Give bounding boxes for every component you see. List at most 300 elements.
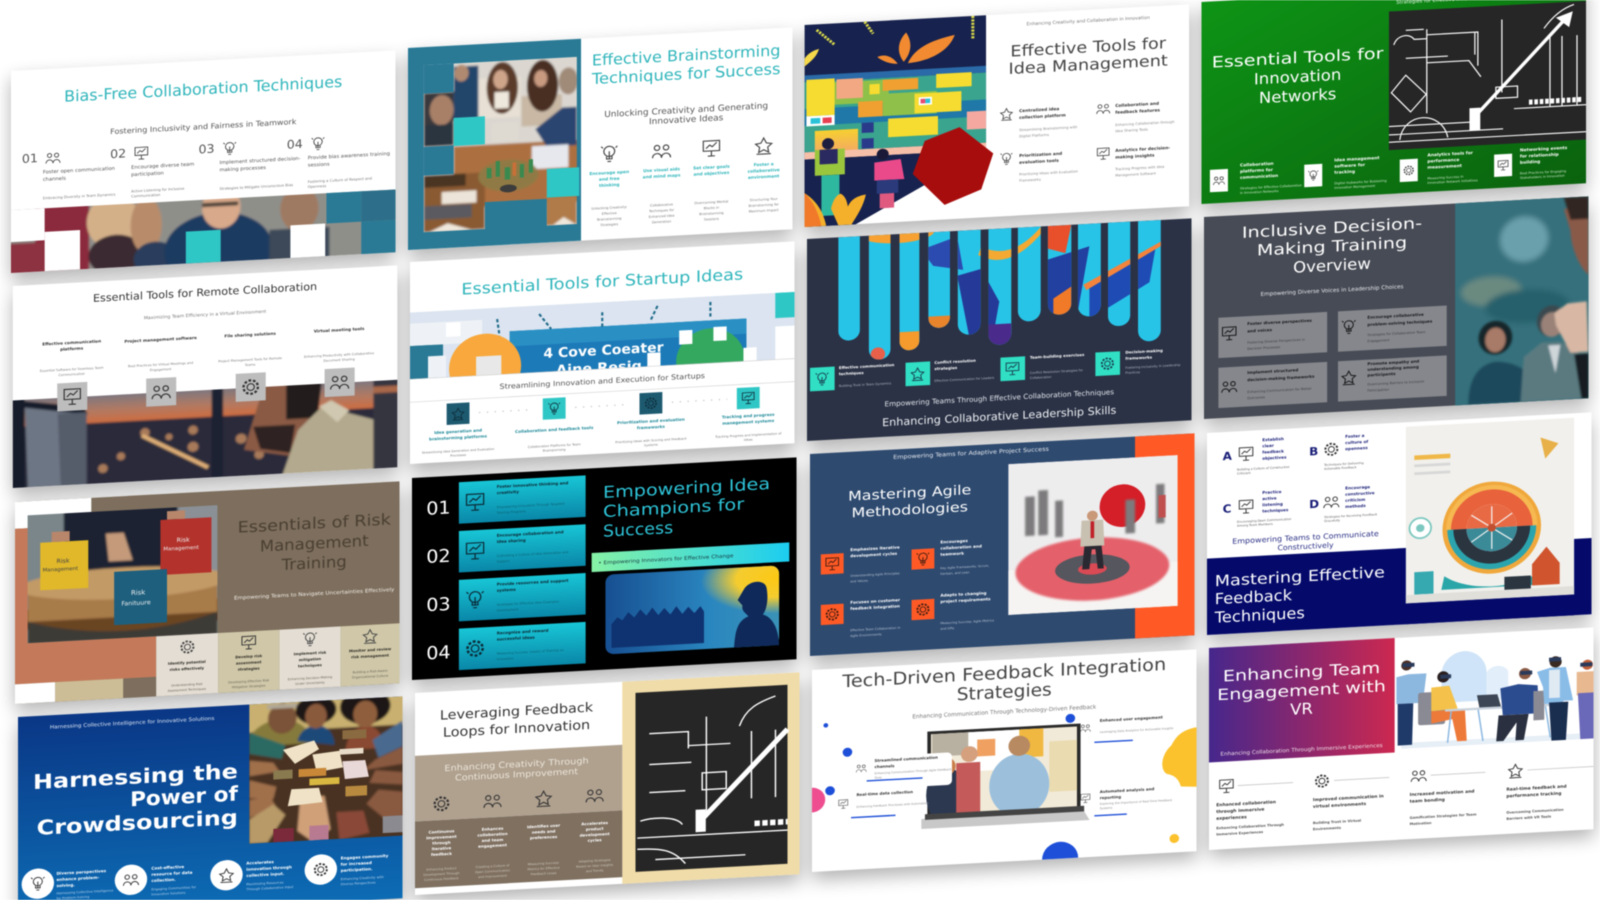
four cards: Engagement (1367, 338, 1390, 343)
subtitle: Empowering Teams to Navigate Uncertainties Effectively (234, 587, 394, 602)
slide: Tech-Driven Feedback Integration Strategies (812, 649, 1197, 872)
four cards: Understanding Risk (171, 682, 203, 688)
four items: building (1520, 159, 1540, 166)
four numbered items: sessions (308, 162, 330, 169)
four items: measurement (1427, 163, 1462, 171)
title: Making Training (1257, 233, 1407, 260)
slide: Harnessing the Power of Crowdsourcing (18, 686, 412, 900)
slide: Essential Tools for Innovation Networks (1202, 0, 1586, 204)
title: Bias-Free Collaboration Techniques (64, 72, 342, 106)
four columns: Best Practices for Virtual Meetings and (128, 361, 193, 368)
four tool items: collection platform (1019, 113, 1066, 120)
four items: teamwork (940, 551, 964, 557)
four items: platforms for (1240, 167, 1274, 175)
four cards: Assessment Techniques (168, 687, 206, 693)
four items: solving. (56, 882, 75, 888)
photo: risk blocks on wood: Risk (131, 589, 145, 597)
four items: Adapts to changing (940, 590, 987, 598)
four items: and KPIs (940, 626, 955, 631)
four items (821, 537, 994, 640)
four items (22, 850, 389, 900)
four items: Key Agile Frameworks: Scrum, (940, 564, 989, 570)
brown band with four columns: Accelerates (581, 820, 609, 826)
four columns: Project Management Tools for Remote (218, 356, 282, 363)
brown band with four columns: improvement (426, 834, 457, 840)
four cyan cards: systems (497, 587, 517, 593)
four icon items: Overcoming Communication (1506, 808, 1564, 815)
slide: Enhancing Collaborative Leadership Skills (807, 207, 1192, 441)
four text callouts: Systems (1100, 806, 1113, 810)
four items: Diverse Perspectives (341, 881, 376, 886)
four items: in Innovation Networks (1240, 189, 1279, 195)
four icon items: Environments (1313, 826, 1341, 831)
four numbered items: Strategies to Mitigate Unconscious Bias (219, 183, 293, 191)
brown band with four columns: Based on User Insights (576, 863, 614, 869)
title: Crowdsourcing (37, 806, 238, 840)
subtitle: Enhancing Communication Through Technology-Driven Feedback (912, 705, 1097, 720)
four cyan cards: Recognize and reward (497, 628, 549, 635)
taupe band with subtitle: Continuous Improvement (455, 767, 579, 784)
taupe band with subtitle (415, 745, 622, 821)
four tool items: feedback features (1115, 107, 1161, 115)
brown band with four columns: Metrics for Effective (527, 866, 560, 871)
four items: Accelerates (246, 859, 275, 866)
title: Loops for Innovation (443, 718, 590, 741)
photo: team over table (422, 56, 578, 233)
four cards: Mitigation Strategies (232, 684, 266, 689)
four items: Maximizing Resources (246, 880, 284, 886)
four tool steps: brainstorming platforms (429, 433, 488, 441)
photo: risk blocks on wood: Risk (177, 537, 190, 544)
four items: Emphasizes iterative (850, 545, 900, 552)
four columns: Unlocking Creativity: (591, 205, 627, 211)
four cyan cards: creativity (497, 489, 519, 495)
brown band with four columns: Continuous Feedback (424, 876, 459, 882)
four cards: strategies (238, 667, 261, 672)
four columns: Enhanced Idea (649, 214, 674, 219)
four tool steps: Streamlining Idea Generation and Evaluation (422, 447, 494, 455)
brown band with four columns: engagement (478, 842, 507, 849)
four tool steps: Prioritizing Ideas with Scoring and Feedback (615, 437, 687, 444)
title: Essentials of Risk (238, 510, 392, 537)
title (1214, 563, 1385, 627)
four tool steps: Collaboration and feedback tools (515, 425, 594, 434)
colour blocks (15, 494, 156, 704)
four columns: Sessions (704, 217, 719, 222)
title: Techniques (1214, 603, 1305, 627)
four columns: collaborative (748, 167, 780, 174)
brown band with four columns: preferences (530, 834, 558, 840)
illustration: gauge dashboard (1406, 418, 1574, 604)
brown band with four columns: collaboration (477, 831, 508, 838)
photo: hands with puzzle (248, 696, 404, 844)
four numbered items: 02 (110, 147, 126, 161)
title (603, 474, 770, 541)
subtitle: Harnessing Collective Intelligence for Innovative Solutions (50, 716, 215, 731)
title: Methodologies (851, 500, 968, 521)
four items: Effective Team Collaboration in (850, 626, 900, 632)
four icon items (1216, 760, 1594, 837)
illustration: team at kanban board (805, 15, 986, 227)
four items (810, 347, 1180, 392)
four cards: Participation (1367, 388, 1389, 393)
A B C D items: Encouraging Open Communication (1237, 517, 1291, 524)
four tool steps: Ideas (744, 438, 753, 442)
line art chart image (1389, 1, 1586, 150)
A B C D items: Criticism (1237, 471, 1251, 476)
four items: collection. (151, 877, 176, 883)
four cards: Encourage collaborative (1367, 312, 1424, 320)
four numbered items: channels (43, 176, 66, 183)
title: Mastering Agile (848, 483, 971, 505)
title (1212, 44, 1384, 110)
four columns: Generation (652, 219, 671, 224)
brown band with four columns: feedback (431, 851, 452, 857)
four columns: Document Sharing (323, 357, 355, 363)
four icon items: Motivation (1410, 821, 1432, 826)
four items: Best Practices for Engaging (1520, 169, 1566, 175)
illustration: banner image: Aine Resig (556, 359, 642, 379)
A B C D items: Establish (1262, 436, 1284, 442)
four items: Through Collaborative Input (245, 885, 294, 891)
subtitle: Enhancing Creativity and Collaboration in Innovation (1027, 15, 1150, 27)
title: Overview (1293, 254, 1371, 277)
four columns: Essential Software for Seamless Team (40, 366, 103, 373)
four cards: Decision Processes (1247, 345, 1280, 351)
four columns: Communication (58, 372, 85, 377)
four tool items: Collaboration and (1115, 101, 1159, 108)
A B C D items: methods (1345, 503, 1366, 509)
four cards (1218, 305, 1447, 408)
four items: Kanban, and Lean (940, 570, 969, 576)
illustration: banner image: 4 Cove Coeater (543, 340, 664, 362)
title: Effective Brainstorming (592, 41, 780, 69)
brown band with four columns: Feedback Loops (531, 871, 557, 876)
slide: Essential Tools for Startup Ideas (410, 241, 795, 464)
four numbered items: 01 (22, 152, 38, 166)
slide: Effective Brainstorming Techniques (408, 27, 793, 250)
brown band with four columns: Creating a Culture of (476, 863, 510, 869)
slide: Enhancing Team Engagement with VR (1209, 627, 1594, 850)
four items: Innovative Solutions (151, 891, 186, 896)
title: Management (260, 531, 369, 556)
four numbered items: Provide bias awareness training (308, 151, 390, 161)
four tool steps: Idea generation and (434, 428, 482, 435)
four columns: thinking (599, 182, 620, 188)
title: Effective Tools for (1010, 34, 1166, 60)
four cyan cards: Cultivating a Culture of Idea Generation and (497, 550, 568, 558)
four tool items: Frameworks (1019, 178, 1041, 183)
title (1009, 34, 1168, 78)
four text callouts: Enhancing Feedback Processes with Automation (856, 801, 929, 809)
four items: Idea management (1334, 155, 1380, 163)
four cards: Strategies for Collaborative Team (1367, 330, 1425, 337)
four text callouts: Enhancing Communication Through Agile Feedback (874, 767, 952, 775)
four items: Understanding Agile Principles (850, 571, 900, 578)
title: Success (603, 518, 673, 541)
four items: Cost-effective (151, 864, 184, 871)
four cyan cards: Innovation (497, 656, 514, 661)
four text callouts: Streamlined communication (874, 755, 938, 763)
four cards: Under Uncertainty (295, 680, 325, 686)
four tool items: Prioritizing Ideas with Evaluation (1019, 170, 1078, 177)
title (841, 655, 1166, 711)
four items: feedback integration (850, 604, 900, 611)
four tool items: Analytics for decision- (1115, 145, 1170, 153)
A B C D items: Techniques for Delivering (1323, 461, 1364, 467)
four icon items: Real-time feedback and (1506, 784, 1567, 793)
title: Enhancing Collaborative Leadership Skills (882, 404, 1117, 429)
illustration: speaker before crowd (605, 565, 779, 654)
four items: Fostering Inclusivity in Leadership (1125, 363, 1180, 370)
title (238, 510, 392, 576)
four items: Effective Communication for Leaders (934, 376, 995, 383)
four icon items: team bonding (1410, 797, 1445, 805)
four items: collective input. (246, 871, 285, 878)
four columns: Set clear goals (693, 164, 730, 171)
four items: Stakeholders in Innovation (1520, 174, 1565, 180)
title: Power of (130, 782, 239, 811)
A B C D items: culture of (1345, 439, 1368, 445)
four tool steps (422, 386, 782, 459)
slide: Bias-Free Collaboration Techniques (5, 50, 402, 298)
numbers: 01 (426, 498, 451, 520)
title (1242, 214, 1422, 279)
subtitle: Empowering Diverse Voices in Leadership Choices (1260, 284, 1404, 298)
four items: Engaging Communities for (151, 885, 197, 891)
four items: Measuring Success in (1427, 175, 1464, 180)
A B C D items: C (1223, 502, 1231, 516)
four numbered items: Active Listening for Inclusive (131, 187, 185, 193)
four tool items: Management Software (1115, 172, 1156, 178)
four items: enhance problem- (56, 875, 100, 882)
four items: Diverse perspectives (56, 868, 107, 876)
brown band with four columns: and team (482, 837, 503, 843)
numbers: 04 (426, 643, 451, 664)
four icon items: through immersive (1216, 807, 1265, 815)
illustration: cyan rounded stripes (838, 219, 1162, 360)
brown band with four columns: product (586, 826, 604, 832)
taupe band with subtitle: Enhancing Creativity Through (444, 757, 589, 774)
four columns (40, 324, 374, 412)
illustration: laptop with meeting (921, 723, 1090, 829)
title: Essential Tools for Startup Ideas (461, 265, 743, 298)
four columns: Structuring Your (750, 197, 778, 202)
A B C D items: D (1309, 497, 1319, 511)
four columns: Collaborative (650, 203, 673, 208)
four numbered items: Implement structured decision- (219, 156, 301, 166)
four cards: Building a Risk-Aware (353, 669, 388, 674)
four cards: Overcoming Barriers to Inclusive (1367, 380, 1424, 386)
brown band with four columns: Development Through (423, 871, 460, 877)
four icon items: Immersive Experiences (1216, 830, 1263, 837)
four text callouts (839, 714, 1174, 830)
four icon items: Enhancing Collaboration Through (1216, 823, 1285, 830)
slide: Leveraging Feedback Loops for Innovation (415, 672, 800, 895)
four columns: Brainstorming (597, 217, 622, 222)
four cards: risk management (351, 653, 389, 659)
brown band with four columns: and Improvement (478, 874, 508, 879)
A B C D items: Among Team Members (1237, 522, 1273, 528)
four cards: Fostering Diverse Perspectives in (1247, 338, 1305, 345)
four items: Analytics tools for (1427, 150, 1474, 158)
four items: Innovation Network Initiatives (1427, 178, 1478, 185)
photo: team around laptop (10, 190, 394, 274)
four tool steps: management systems (722, 418, 775, 426)
four items: Engages community (341, 853, 389, 861)
four tool items: Streamlining Brainstorming with (1019, 125, 1077, 132)
four items (1210, 145, 1568, 197)
four columns: Virtual meeting tools (314, 326, 365, 334)
gradient title panel: Enhancing Collaboration Through Immersive Experiences (1220, 743, 1383, 758)
title: Networks (1259, 85, 1336, 107)
title: Empowering Idea (603, 474, 770, 502)
four cyan cards (459, 475, 586, 670)
four items: frameworks (1125, 355, 1153, 361)
numbers: 02 (426, 546, 451, 568)
title: Training (281, 552, 347, 574)
navy band under image (1406, 594, 1574, 624)
four items: and Values (850, 579, 868, 584)
title: Essential Tools for (1212, 44, 1384, 72)
four columns: Effective communication (42, 339, 101, 347)
four tool steps: Collaboration Platforms for Team (528, 442, 581, 449)
slide: Inclusive Decision-Making Training Overview (1204, 190, 1599, 425)
four text callouts: Leveraging Data Analytics for Actionable Insights (1100, 726, 1174, 734)
four tool steps: frameworks (637, 424, 666, 430)
four tool items: Tracking Progress with Idea (1114, 165, 1164, 171)
A B C D items: Building a Culture of Constructive (1237, 465, 1290, 472)
brown band with four columns: development (580, 831, 610, 838)
four items: Digital Hubworks for Bolstering (1334, 179, 1387, 185)
four columns: and objectives (693, 170, 730, 177)
four cyan cards: Training Programs (496, 509, 526, 515)
four items: project requirements (940, 596, 991, 604)
A B C D items: Strategies for Receiving Feedback (1324, 512, 1378, 519)
four items: for increased (341, 860, 372, 867)
photo: remote worker at dusk (12, 379, 398, 489)
four columns: Overcoming Mental (694, 200, 728, 205)
four columns: Blocks in (704, 206, 719, 210)
photo: risk blocks on wood: Management (43, 566, 78, 574)
four items: Agile Environments (850, 632, 882, 638)
slide: Essentials of Risk Management Training (15, 481, 400, 704)
four items: Effective communication (839, 362, 895, 370)
four items: Strategies for Effective Collaboration (1240, 183, 1302, 191)
four numbered items: participation (131, 171, 164, 178)
four cards: participants (1367, 371, 1396, 377)
A B C D items: techniques (1262, 507, 1289, 513)
four numbered items: Embracing Diversity in Team Dynamics (43, 193, 116, 200)
four cards: problem-solving techniques (1367, 319, 1433, 327)
shape: dark red hexagon (913, 125, 993, 207)
numbers (426, 498, 451, 664)
four tool steps: Systems (644, 443, 658, 447)
four items: strategies (934, 365, 958, 371)
four items: tracking (1334, 169, 1355, 176)
four cards: Enhancing Decision-Making (288, 675, 332, 681)
four cards: risks effectively (170, 666, 205, 672)
four columns: Strategies (600, 222, 618, 227)
four cyan cards: Empowering Innovators Through Targeted (497, 502, 565, 509)
gradient title panel: VR (1290, 699, 1313, 719)
decorative blobs and dots (812, 703, 1197, 872)
A B C D items: Encourage (1345, 484, 1370, 490)
four icon items: Improved communication in (1313, 794, 1384, 803)
four items: communication (1240, 173, 1278, 181)
four items: Innovation Management (1334, 184, 1376, 190)
four numbered items (22, 133, 390, 204)
four cyan cards: Development (497, 607, 519, 612)
slide: Empowering Idea Champions for Success (412, 457, 797, 680)
four columns: Brainstorming (699, 211, 724, 216)
A B C D items: listening (1262, 501, 1283, 507)
four tool items: making insights (1115, 153, 1155, 160)
four cards: techniques (298, 663, 323, 668)
four columns: and free (599, 176, 620, 182)
photo: leaders in teal blur (1454, 196, 1589, 406)
title: Mastering Effective (1215, 563, 1385, 590)
four icon items: Increased motivation and (1410, 789, 1475, 798)
four numbered items: 04 (287, 137, 303, 152)
four text callouts: Exploring the Importance of Real-Time Feedback (1100, 798, 1173, 806)
four items: Conflict resolution (934, 358, 976, 365)
A B C D items: openness (1345, 445, 1368, 451)
brown band with four columns: through (432, 840, 451, 846)
four icon items: Building Trust in Virtual (1313, 819, 1361, 825)
four items: Enhancing Creativity with (341, 875, 384, 881)
four items: collaboration and (940, 544, 982, 551)
title: Champions for (603, 494, 744, 521)
A B C D items: Gracefully (1324, 518, 1340, 523)
slide: Effective Tools for Idea Management (805, 4, 1189, 227)
four tool items: Prioritization and (1019, 151, 1062, 158)
four items: innovation through (246, 864, 292, 872)
four columns: Brainstorming for (748, 202, 779, 208)
A B C D items: Actionable Feedback (1324, 465, 1357, 471)
four numbered items: Openness (308, 184, 326, 189)
four text callouts: Real-time data collection (856, 789, 913, 797)
accent blocks (45, 189, 396, 271)
subtitle strip: • Empowering Innovators for Effective Change (598, 553, 733, 566)
brown band with four columns: Enhancing Product (426, 866, 457, 872)
subtitle line two: Constructively (1277, 541, 1334, 552)
four cards: Organizational Culture (352, 674, 388, 680)
four cards: assessment (236, 660, 262, 666)
subtitle: Unlocking Creativity and Generating (604, 102, 768, 120)
four items: Practices (1125, 370, 1140, 375)
four cards: Foster diverse perspectives (1247, 318, 1313, 326)
four cards: Implement structured (1247, 367, 1298, 375)
four tool steps: Tracking and progress (722, 412, 775, 420)
four cards: Monitor and review (349, 647, 392, 653)
four items: resource for data (151, 870, 193, 877)
brown band with four columns: Adapting Strategies (579, 858, 611, 864)
four tool items: Idea Sharing Tools (1115, 128, 1148, 133)
four numbered items: Encourage diverse team (131, 162, 194, 171)
four columns: Teams (244, 363, 256, 367)
four tool items (1001, 100, 1175, 184)
gradient title panel (1209, 638, 1395, 762)
slide: Essential Tools for Remote Collaboration (7, 265, 403, 501)
subtitle strip: Streamlining Innovation and Execution for Startups (500, 371, 705, 391)
four cards: Developing Effective Risk (228, 678, 269, 684)
title: Feedback (1215, 586, 1293, 608)
illustration: team with VR headsets (1396, 644, 1594, 749)
four cards: Implement risk (294, 651, 327, 656)
title: Innovation (1254, 65, 1341, 88)
subtitle strip (592, 542, 789, 572)
